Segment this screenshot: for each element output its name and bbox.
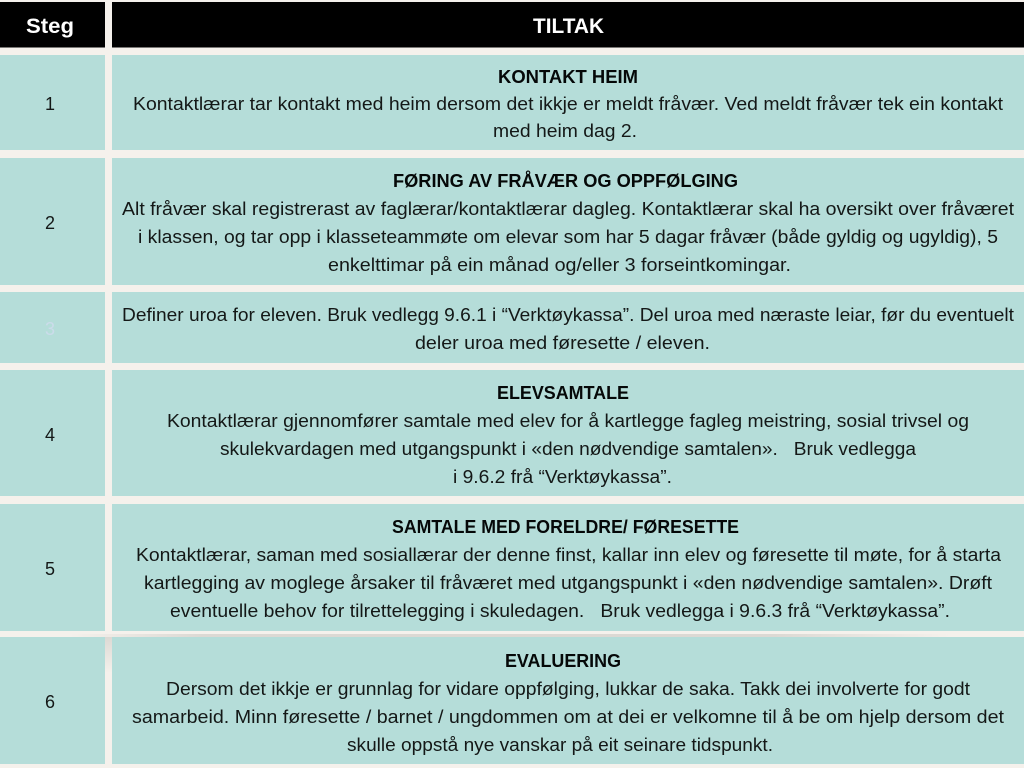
row 2: absence registration and follow-up: i klassen, og tar opp i klasseteammøte om elevar som har 5 dagar fråvær (både gyldig og ugyldig), 5 bbox=[138, 227, 998, 247]
row 4: pupil conversation bbox=[0, 370, 1024, 496]
row 6: evaluation: Dersom det ikkje er grunnlag for vidare oppfølging, lukkar de saka. Takk dei involverte for godt bbox=[166, 679, 970, 699]
row 6: evaluation bbox=[0, 637, 1024, 764]
row 3: define concern: deler uroa med føresette / eleven. bbox=[415, 333, 710, 353]
row 5: conversation with parents: Kontaktlærar, saman med sosiallærar der denne finst, kallar inn elev og føresette til møte, for å starta bbox=[136, 545, 1002, 565]
row 5: conversation with parents: kartlegging av moglege årsaker til fråværet med utgangspunkt i «den nødvendige samtalen». Drøft bbox=[144, 573, 992, 593]
row 1: contact home: med heim dag 2. bbox=[493, 121, 637, 141]
row 2: absence registration and follow-up: 2 bbox=[45, 213, 55, 233]
row 1: contact home bbox=[0, 55, 1024, 150]
row 2: absence registration and follow-up: FØRING AV FRÅVÆR OG OPPFØLGING bbox=[393, 171, 738, 191]
row 1: contact home: 1 bbox=[45, 94, 55, 114]
row 2: absence registration and follow-up: Alt fråvær skal registrerast av faglærar/kontaktlærar dagleg. Kontaktlærar skal ha oversikt over fråværet bbox=[122, 199, 1014, 219]
row 6: evaluation: EVALUERING bbox=[505, 651, 621, 671]
header: Steg: Steg bbox=[26, 15, 74, 38]
row 6: evaluation: skulle oppstå nye vanskar på eit seinare tidspunkt. bbox=[347, 735, 773, 755]
header row bbox=[0, 2, 1024, 48]
row 4: pupil conversation: Kontaktlærar gjennomfører samtale med elev for å kartlegge fagleg meistring, sosial trivsel og bbox=[167, 411, 969, 431]
row 2: absence registration and follow-up bbox=[0, 158, 1024, 285]
row 3: define concern: Definer uroa for eleven. Bruk vedlegg 9.6.1 i “Verktøykassa”. Del uroa med næraste leiar, før du eventuelt bbox=[122, 305, 1014, 325]
row 4: pupil conversation: i 9.6.2 frå “Verktøykassa”. bbox=[453, 467, 672, 487]
row 6: evaluation: samarbeid. Minn føresette / barnet / ungdommen om at dei er velkomne til å be om hjelp dersom det bbox=[132, 707, 1004, 727]
header: TILTAK: TILTAK bbox=[533, 15, 604, 38]
row 5: conversation with parents bbox=[0, 504, 1024, 631]
row 2: absence registration and follow-up: enkelttimar på ein månad og/eller 3 forseintkomingar. bbox=[328, 255, 791, 275]
row 4: pupil conversation: 4 bbox=[45, 425, 55, 445]
row 1: contact home: KONTAKT HEIM bbox=[498, 67, 638, 87]
row 3: define concern bbox=[0, 292, 1024, 363]
row 4: pupil conversation: ELEVSAMTALE bbox=[497, 383, 629, 403]
row 3: define concern: 3 bbox=[45, 319, 55, 339]
row 4: pupil conversation: skulekvardagen med utgangspunkt i «den nødvendige samtalen». Bruk vedlegga bbox=[220, 439, 917, 459]
row 6: evaluation: 6 bbox=[45, 692, 55, 712]
row 5: conversation with parents: 5 bbox=[45, 559, 55, 579]
row 5: conversation with parents: SAMTALE MED FORELDRE/ FØRESETTE bbox=[392, 517, 739, 537]
row 5: conversation with parents: eventuelle behov for tilrettelegging i skuledagen. Bruk vedlegga i 9.6.3 frå “Verktøykassa”. bbox=[170, 601, 950, 621]
row 1: contact home: Kontaktlærar tar kontakt med heim dersom det ikkje er meldt fråvær. Ved meldt fråvær tek ein kontakt bbox=[133, 94, 1003, 114]
